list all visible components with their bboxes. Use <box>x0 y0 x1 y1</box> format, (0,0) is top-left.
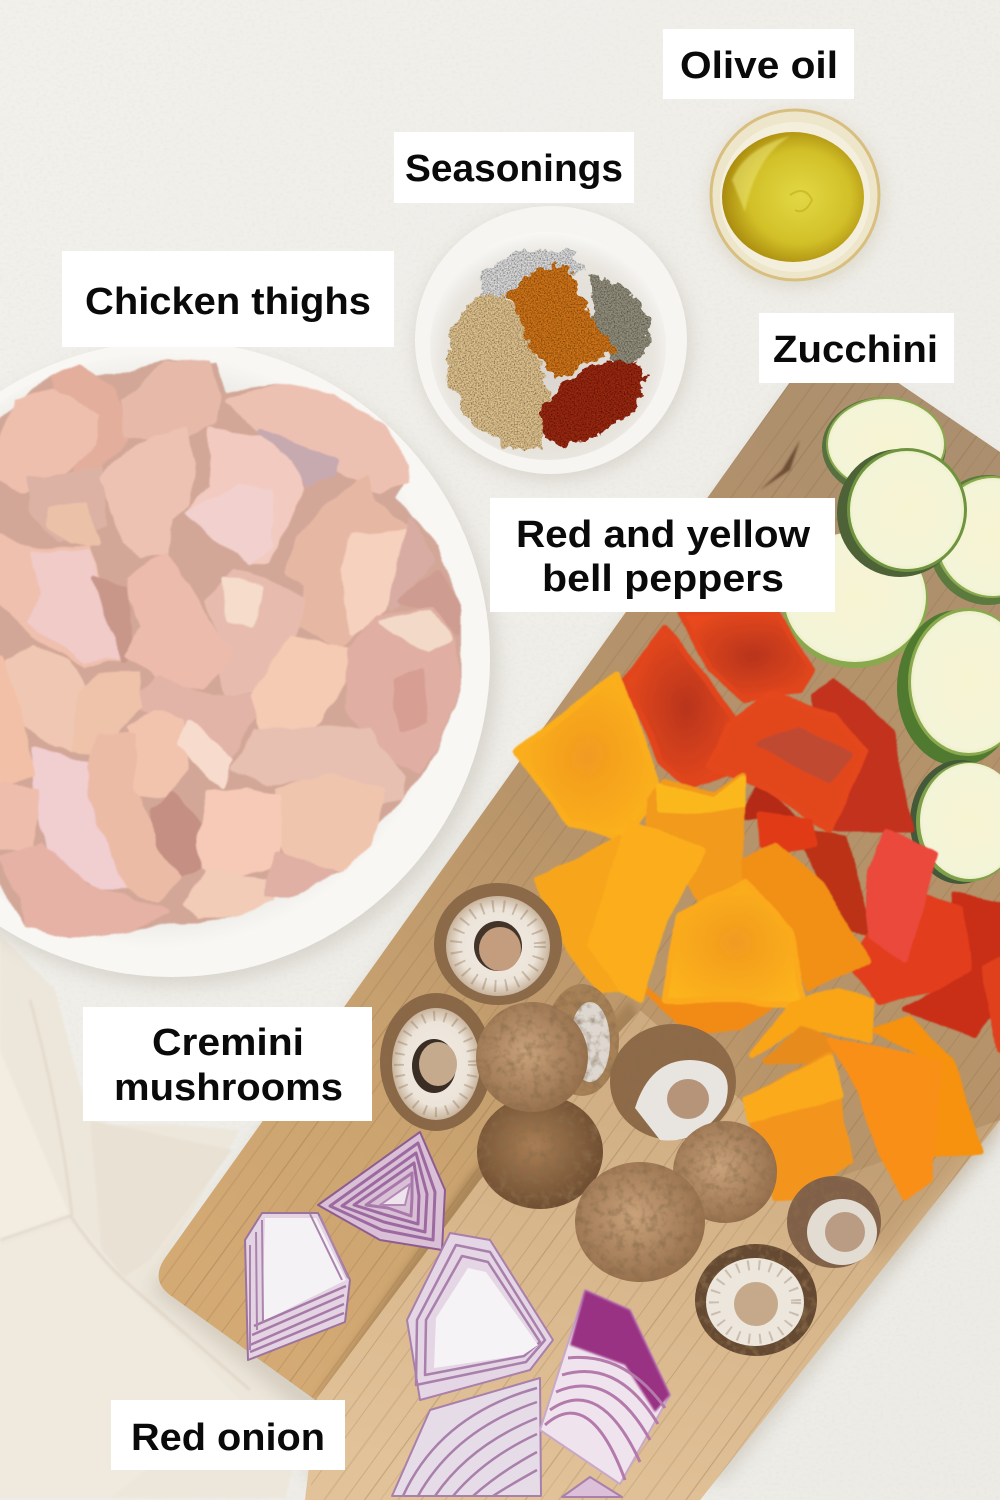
bowl inner <box>0 352 463 948</box>
zucchini slice 5 <box>897 608 1000 766</box>
board shadow <box>150 345 1000 1480</box>
onion wedge bottom <box>392 1378 541 1496</box>
chicken thigh pieces <box>0 362 458 936</box>
mushroom cap lower right <box>673 1121 777 1223</box>
glass dish shadow <box>708 112 884 288</box>
label: cremini mushrooms <box>83 1007 372 1121</box>
zucchini slice 1 <box>822 397 946 497</box>
zucchini slice 6 <box>910 760 1000 884</box>
cremini mushrooms <box>380 883 881 1356</box>
zucchini slices <box>782 397 1000 884</box>
mushroom gills right <box>787 1176 881 1268</box>
label: cremini mushrooms: Cremini <box>152 1022 304 1064</box>
olive oil dish <box>708 110 884 288</box>
olive oil <box>722 132 864 262</box>
wood knot <box>760 440 800 490</box>
glass inner highlight <box>720 122 870 272</box>
onion wedge top <box>318 1132 445 1250</box>
cutting boards <box>152 383 1000 1500</box>
label: red and yellow bell peppers: Red and yellow <box>516 514 810 556</box>
bowl rim <box>0 341 490 977</box>
seasoning bowl inner <box>430 232 666 460</box>
label: cremini mushrooms: mushrooms <box>114 1067 343 1109</box>
label: olive oil: Olive oil <box>680 45 838 87</box>
seasoning bowl body <box>415 206 687 474</box>
label: red and yellow bell peppers: bell peppers <box>542 558 784 600</box>
chicken bowl <box>0 341 498 986</box>
onion fragment <box>562 1477 622 1497</box>
zucchini slice 2 <box>837 448 967 577</box>
board seam shadow <box>315 1000 640 1400</box>
mushroom large cap <box>575 1162 705 1282</box>
label: chicken thighs <box>62 251 394 347</box>
dark red pepper pieces <box>740 682 1000 1050</box>
label: red onion <box>111 1400 345 1470</box>
mushroom gills top <box>434 883 562 1005</box>
zucchini slice 3 <box>928 475 1000 605</box>
red pepper pieces <box>625 612 968 1000</box>
label: red onion: Red onion <box>131 1417 325 1459</box>
mushroom gills bottom <box>695 1244 817 1356</box>
bell peppers <box>516 612 1000 1198</box>
zucchini slice 4 <box>782 532 928 668</box>
onion wedge centre <box>407 1233 553 1400</box>
label: zucchini <box>759 313 954 383</box>
onion wedge left <box>245 1213 350 1360</box>
mushroom gills left <box>380 993 492 1131</box>
spice mounds <box>448 250 648 450</box>
mushroom cap centre <box>476 1002 588 1112</box>
label: seasonings: Seasonings <box>405 148 623 190</box>
label: zucchini: Zucchini <box>773 329 938 371</box>
red onion pieces <box>245 1132 670 1497</box>
orange and yellow pepper pieces <box>516 673 980 1198</box>
glass dish <box>711 110 879 280</box>
oil swirl <box>790 191 812 211</box>
bowl shadow <box>0 350 498 986</box>
mushroom dark cap <box>477 1095 603 1209</box>
mushroom gills centre right <box>610 1024 736 1141</box>
darker board area behind vegetables <box>760 620 1000 1260</box>
cloth napkin <box>0 935 310 1498</box>
onion wedge right <box>540 1290 670 1484</box>
label: olive oil <box>663 29 854 99</box>
label: red and yellow bell peppers <box>490 498 835 612</box>
oil reflection <box>732 136 790 212</box>
wood grain <box>160 383 1000 1500</box>
front board <box>305 1010 1000 1500</box>
back board <box>159 333 1000 1500</box>
label: chicken thighs: Chicken thighs <box>85 281 371 323</box>
mushroom behind <box>545 984 619 1096</box>
label: seasonings <box>394 132 634 203</box>
seasonings bowl <box>415 206 691 480</box>
seasoning bowl shadow <box>415 210 691 480</box>
